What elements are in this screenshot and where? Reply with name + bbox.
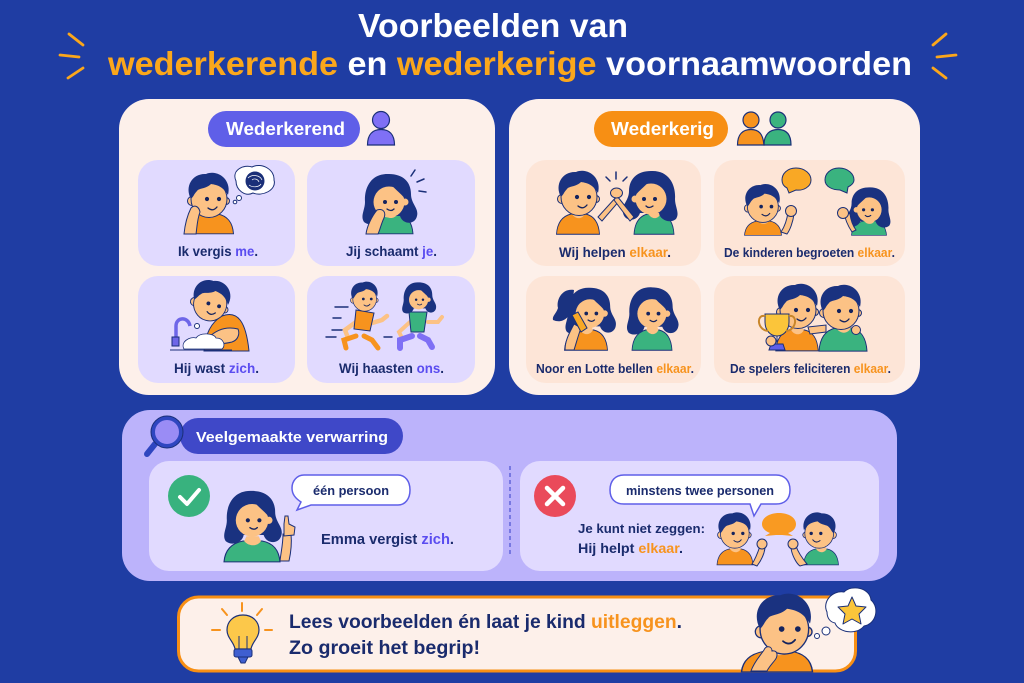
- illustration: girls on the phone: [553, 287, 679, 350]
- heading: veelgemaakte verwarring: [180, 418, 403, 454]
- tip text: [289, 611, 682, 659]
- card: Ik vergis me: [138, 160, 295, 266]
- icon: check mark: [168, 475, 210, 517]
- sentence: Wij helpen elkaar.: [559, 245, 671, 260]
- card: De kinderen begroeten elkaar: [714, 160, 905, 266]
- speech bubble: één persoon: één persoon: [313, 483, 389, 498]
- icon: one person: [368, 112, 394, 145]
- icon: sparks right: [933, 34, 956, 78]
- sentence: Ik vergis me.: [178, 244, 258, 259]
- tip text: Lees voorbeelden én laat je kind uitleggen.: [289, 611, 682, 633]
- heading: wederkerig: [594, 111, 728, 147]
- sentence: Jij schaamt je.: [346, 244, 437, 259]
- speech bubble: één persoon: [292, 475, 410, 510]
- heading: wederkerend: Wederkerend: [226, 119, 345, 139]
- title: wederkerende en wederkerige voornaamwoorden: [107, 45, 912, 82]
- icon: sparks left: [60, 34, 83, 78]
- heading: wederkerend: [208, 111, 360, 147]
- speech bubble: minstens twee personen: [610, 475, 790, 516]
- sentence: Je kunt niet zeggen:: [578, 521, 705, 536]
- icon: cross: [534, 475, 576, 517]
- illustration: girl pointing up: [224, 491, 295, 562]
- card: incorrect: [520, 461, 879, 571]
- title: Voorbeelden van: [358, 7, 628, 44]
- illustration: ashamed girl: [362, 170, 426, 234]
- sentence: Hij wast zich.: [174, 361, 259, 376]
- illustration: thinking boy: [742, 588, 876, 672]
- card: Wij helpen elkaar: [526, 160, 701, 266]
- illustration: confused boy: [184, 165, 274, 234]
- sentence: De spelers feliciteren elkaar.: [730, 361, 891, 376]
- banner: tip: [178, 588, 876, 672]
- sentence: Hij helpt elkaar.: [578, 540, 683, 556]
- illustration: players with trophy: [759, 284, 867, 351]
- panel: wederkerend: [119, 99, 495, 395]
- sentence: Wij haasten ons.: [339, 361, 444, 376]
- illustration: running boy and girl: [326, 282, 442, 348]
- illustration: high five: [556, 171, 678, 234]
- divider: [509, 466, 511, 556]
- panel: wederkerig: [509, 99, 920, 395]
- icon: magnifier: [147, 416, 183, 454]
- card: correct: [149, 461, 503, 571]
- heading: wederkerig: Wederkerig: [611, 119, 714, 139]
- card: De spelers feliciteren elkaar: [714, 276, 905, 383]
- panel: veelgemaakte verwarring: [122, 410, 897, 581]
- icon: two persons: [738, 112, 791, 145]
- card: Hij wast zich: [138, 275, 295, 383]
- card: Noor en Lotte bellen elkaar: [526, 276, 701, 383]
- title: [107, 7, 912, 82]
- tip text: Zo groeit het begrip!: [289, 637, 480, 659]
- card: Jij schaamt je: [307, 160, 475, 266]
- heading: veelgemaakte verwarring: Veelgemaakte verwarring: [196, 429, 388, 446]
- illustration: two boys talking: [717, 512, 838, 566]
- sentence: Emma vergist zich.: [321, 532, 454, 548]
- sentence: De kinderen begroeten elkaar.: [724, 245, 895, 260]
- card: Wij haasten ons: [307, 276, 475, 383]
- icon: light bulb: [212, 603, 272, 663]
- illustration: boy washing: [170, 275, 249, 351]
- sentence: Noor en Lotte bellen elkaar.: [536, 361, 694, 376]
- illustration: children greeting: [744, 168, 890, 235]
- speech bubble: minstens twee personen: minstens twee personen: [626, 484, 774, 498]
